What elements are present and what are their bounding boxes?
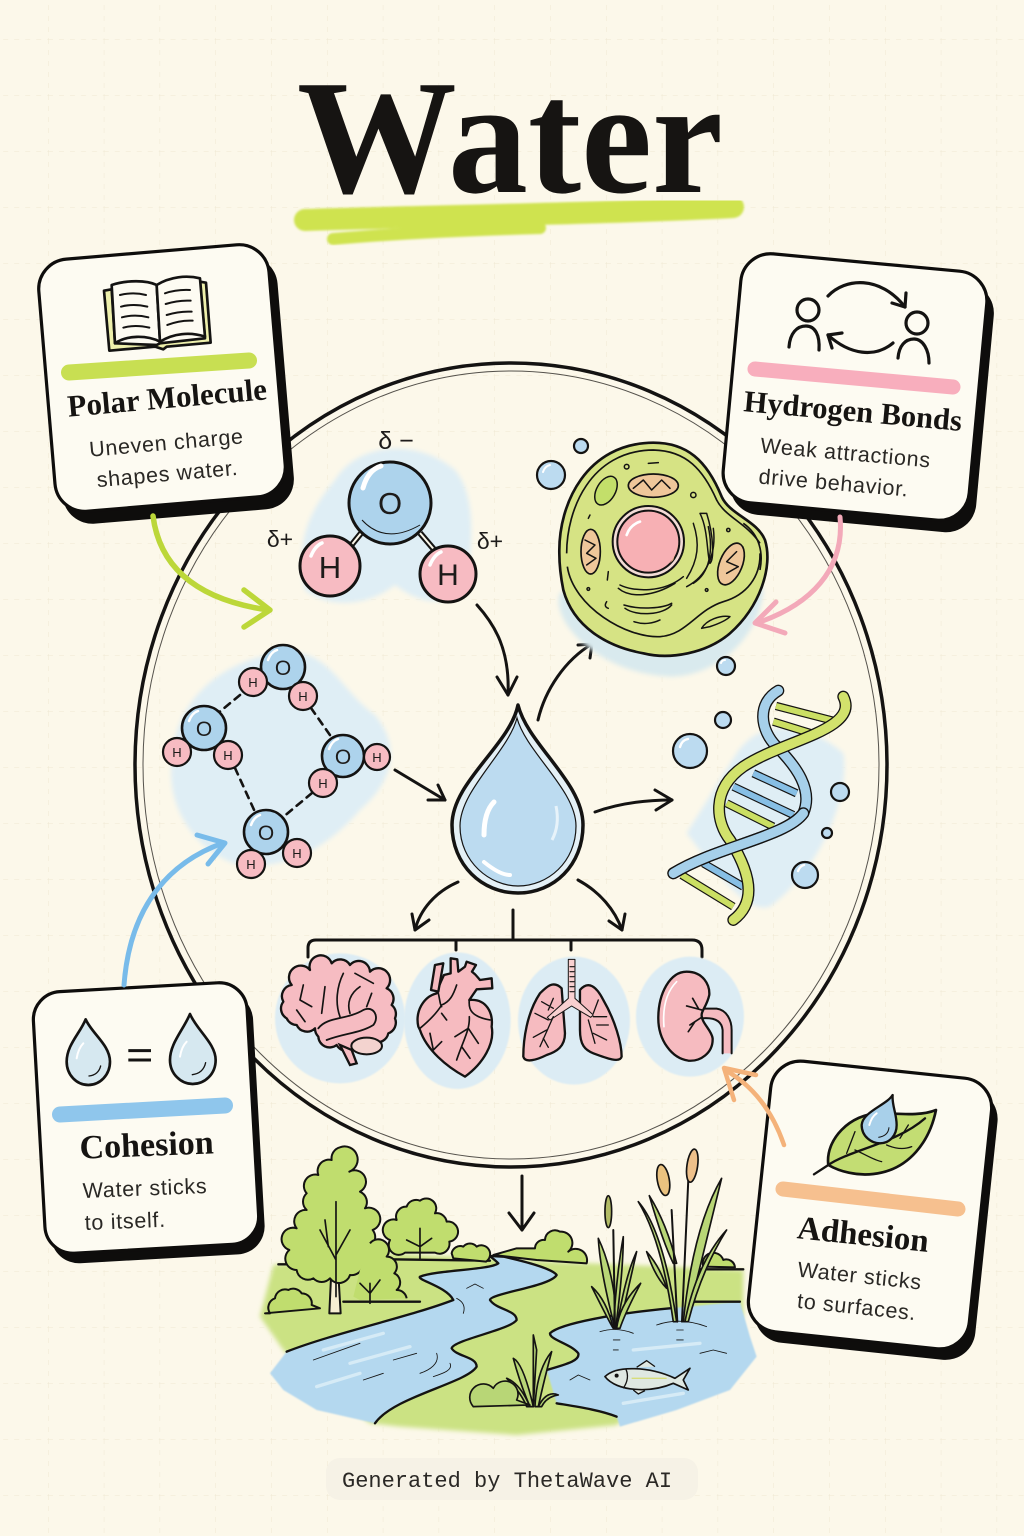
organ row: brain, heart, lungs, kidney [275, 952, 744, 1089]
water molecule [267, 427, 503, 603]
card: polar molecule [36, 242, 296, 526]
hydrogen bonded water cluster: H [223, 748, 233, 763]
hydrogen bonded water cluster: O [258, 822, 274, 845]
central circle [135, 363, 887, 1167]
hydrogen bonded water cluster: O [275, 657, 291, 680]
grass [260, 1253, 743, 1435]
card: cohesion: Cohesion [79, 1124, 214, 1167]
footer badge [326, 1458, 698, 1500]
arrow: polar molecule to molecule [153, 516, 270, 627]
icon: two drops with equals sign [67, 1014, 216, 1085]
card: hydrogen bonds: Weak attractions [759, 434, 932, 472]
card: hydrogen bonds: drive behavior. [758, 465, 910, 502]
shoreline ink [278, 1256, 743, 1423]
small tree and shrubs [265, 1198, 735, 1313]
card: adhesion: to surfaces. [796, 1289, 917, 1325]
water molecule: H [319, 550, 341, 585]
hydrogen bonded water cluster: O [196, 718, 212, 741]
lungs [518, 957, 630, 1085]
central water drop [452, 705, 583, 893]
title highlight underline [305, 207, 733, 239]
hydrogen bonded water cluster: H [248, 675, 258, 690]
brain [275, 953, 405, 1083]
water ripples [313, 1284, 727, 1380]
hydrogen bonded water cluster: H [298, 689, 308, 704]
hydrogen bonded water cluster: O [335, 746, 351, 769]
highlight bar [783, 1189, 958, 1209]
water molecule: H [437, 559, 459, 592]
highlight bar [69, 360, 249, 372]
water highlights [317, 1333, 700, 1403]
water molecule: δ+ [477, 528, 503, 554]
icon: open book [104, 277, 211, 351]
card: polar molecule: Polar Molecule [66, 371, 268, 424]
arrows from the drop and to the drop [308, 605, 702, 1230]
highlight bar [755, 369, 953, 387]
kidney [636, 957, 744, 1077]
arrow: hydrogen bonds to cell [755, 517, 840, 633]
card: cohesion [32, 981, 266, 1265]
card: adhesion: Water sticks [796, 1258, 923, 1294]
hydrogen bonded water cluster [163, 645, 391, 878]
card: cohesion: Water sticks [82, 1174, 208, 1203]
water bubbles around the cell [537, 439, 735, 675]
hydrogen bonded water cluster: H [318, 776, 328, 791]
plant cell [559, 443, 767, 677]
card: cohesion: to itself. [84, 1208, 166, 1235]
card: hydrogen bonds: Hydrogen Bonds [742, 384, 964, 438]
arrow: adhesion to organs [724, 1068, 784, 1145]
water molecule: δ+ [267, 526, 293, 552]
arrow: cohesion to cluster [124, 835, 225, 985]
water molecule: O [378, 486, 402, 521]
card: polar molecule: shapes water. [96, 456, 239, 492]
card: hydrogen bonds [720, 251, 997, 535]
cattails and reeds [470, 1178, 727, 1407]
icon: two people exchanging [789, 283, 929, 363]
fish [605, 1361, 690, 1394]
title: Water [297, 48, 723, 228]
hydrogen bonded water cluster: H [292, 846, 302, 861]
water molecule: δ − [378, 427, 414, 455]
river and pond water [270, 1256, 557, 1423]
river landscape [260, 1146, 757, 1435]
tall tree [282, 1146, 380, 1313]
hydrogen bonded water cluster: H [372, 750, 382, 765]
hydrogen bonded water cluster: H [246, 857, 256, 872]
hydrogen bonded water cluster: H [172, 745, 182, 760]
DNA double helix [673, 691, 846, 920]
heart [404, 952, 511, 1089]
icon: leaf with a drop [814, 1095, 936, 1174]
water bubbles around DNA [673, 712, 849, 888]
card: adhesion [745, 1058, 1001, 1363]
footer badge: Generated by ThetaWave AI [342, 1469, 672, 1494]
card: polar molecule: Uneven charge [88, 424, 245, 462]
highlight bar [60, 1106, 225, 1114]
card: adhesion: Adhesion [795, 1210, 931, 1260]
